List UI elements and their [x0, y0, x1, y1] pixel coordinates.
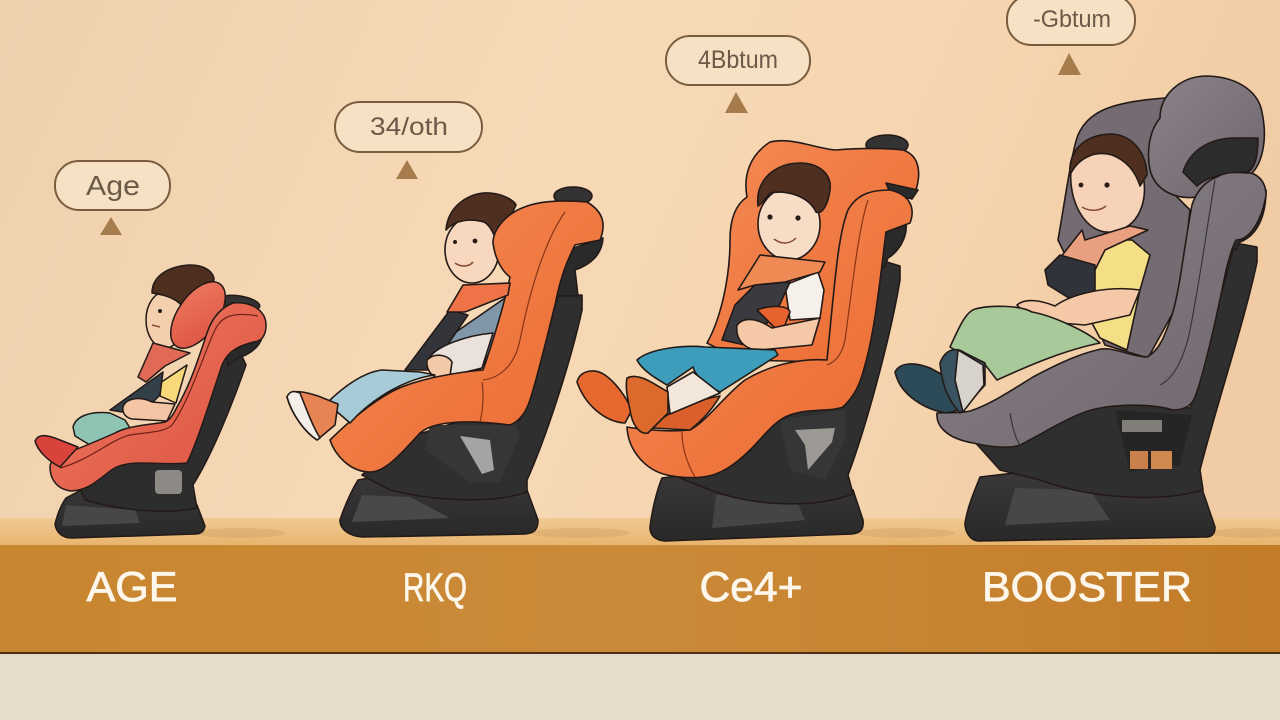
shirt: [785, 272, 824, 320]
callout: second stage: [335, 102, 482, 179]
label: age: AGE: [86, 563, 178, 610]
seat cushion: [627, 190, 912, 478]
headrest: [1148, 76, 1264, 198]
headrest inner: [1183, 138, 1258, 186]
child head: [146, 265, 214, 348]
label badge: [425, 425, 520, 482]
shoe: [35, 436, 78, 467]
harness: [405, 310, 468, 370]
hand: [427, 355, 452, 378]
headrest seam: [480, 212, 565, 422]
seat shell: [80, 352, 246, 511]
feet: [895, 350, 985, 413]
seat base: [340, 470, 538, 537]
seat 3: child with orange seat: [577, 135, 919, 541]
callout: fourth stage: [1007, 0, 1135, 75]
shelf: [0, 518, 1280, 654]
legs: [327, 370, 435, 423]
callout: second stage: 34/oth: [370, 113, 448, 141]
headrest knob: [219, 293, 261, 313]
child head: [1070, 134, 1147, 232]
knob: [554, 187, 592, 205]
seat shell: [973, 243, 1257, 497]
back cushion: [1058, 98, 1190, 358]
seat 2: toddler with orange seat: [287, 187, 603, 537]
collar: [447, 283, 510, 312]
legs: [637, 346, 778, 392]
legs: [73, 413, 130, 445]
toy: [757, 306, 790, 328]
seat shell: [362, 295, 582, 500]
under-bolster shadow: [225, 338, 262, 366]
seat base: [55, 480, 205, 538]
shirt: [1065, 240, 1150, 350]
floor strip: [0, 654, 1280, 720]
arm: [428, 333, 493, 377]
harness: [110, 372, 163, 412]
under-bolster shadow: [1222, 190, 1266, 250]
seat cushion: [937, 172, 1266, 447]
shoe: [287, 392, 338, 440]
seat pad: [652, 396, 720, 430]
headrest gap: [886, 183, 918, 199]
base highlight: [62, 505, 140, 526]
torso: [430, 298, 505, 372]
label: second stage: RKQ: [403, 566, 467, 610]
child head: [445, 193, 516, 283]
callout: third stage: 4Bbtum: [698, 46, 778, 74]
seat 1: infant with red seat: [35, 265, 266, 538]
label badge: [155, 470, 182, 494]
headrest: [160, 272, 236, 358]
shirt: [160, 365, 187, 403]
arm: [737, 318, 820, 350]
under-bolster shadow: [870, 222, 906, 268]
under-bolster shadow: [555, 238, 603, 296]
child head: [758, 163, 830, 260]
base highlight: [352, 495, 450, 522]
label: third stage: Ce4+: [700, 563, 802, 610]
arm: [123, 399, 175, 421]
knob: [866, 135, 908, 155]
callout: fourth stage: -Gbtum: [1033, 6, 1111, 33]
seam: [1010, 180, 1215, 445]
seam: [682, 200, 868, 477]
base highlight: [1005, 488, 1110, 525]
feet: [577, 371, 668, 433]
label badge: [780, 410, 845, 480]
legs: [950, 306, 1100, 380]
harness: [1045, 255, 1095, 300]
callout: age: Age: [86, 170, 140, 201]
back shell: [707, 141, 919, 362]
seat 4: booster with grey seat: [895, 76, 1266, 541]
label: booster: BOOSTER: [982, 563, 1192, 610]
seat cushion: [330, 201, 603, 472]
harness: [722, 282, 790, 345]
callout: third stage: [666, 36, 810, 113]
base highlight: [712, 495, 805, 528]
collar: [138, 343, 190, 382]
label badge: [1115, 410, 1192, 472]
seat cushion: [50, 303, 266, 491]
callout: age: [55, 161, 170, 235]
collar: [1060, 226, 1148, 270]
seam: [60, 314, 258, 468]
arm: [1017, 289, 1140, 325]
seat shell: [680, 260, 900, 504]
seat base: [965, 470, 1215, 541]
shin: [667, 372, 720, 414]
seat base: [650, 470, 863, 541]
collar: [738, 255, 825, 290]
